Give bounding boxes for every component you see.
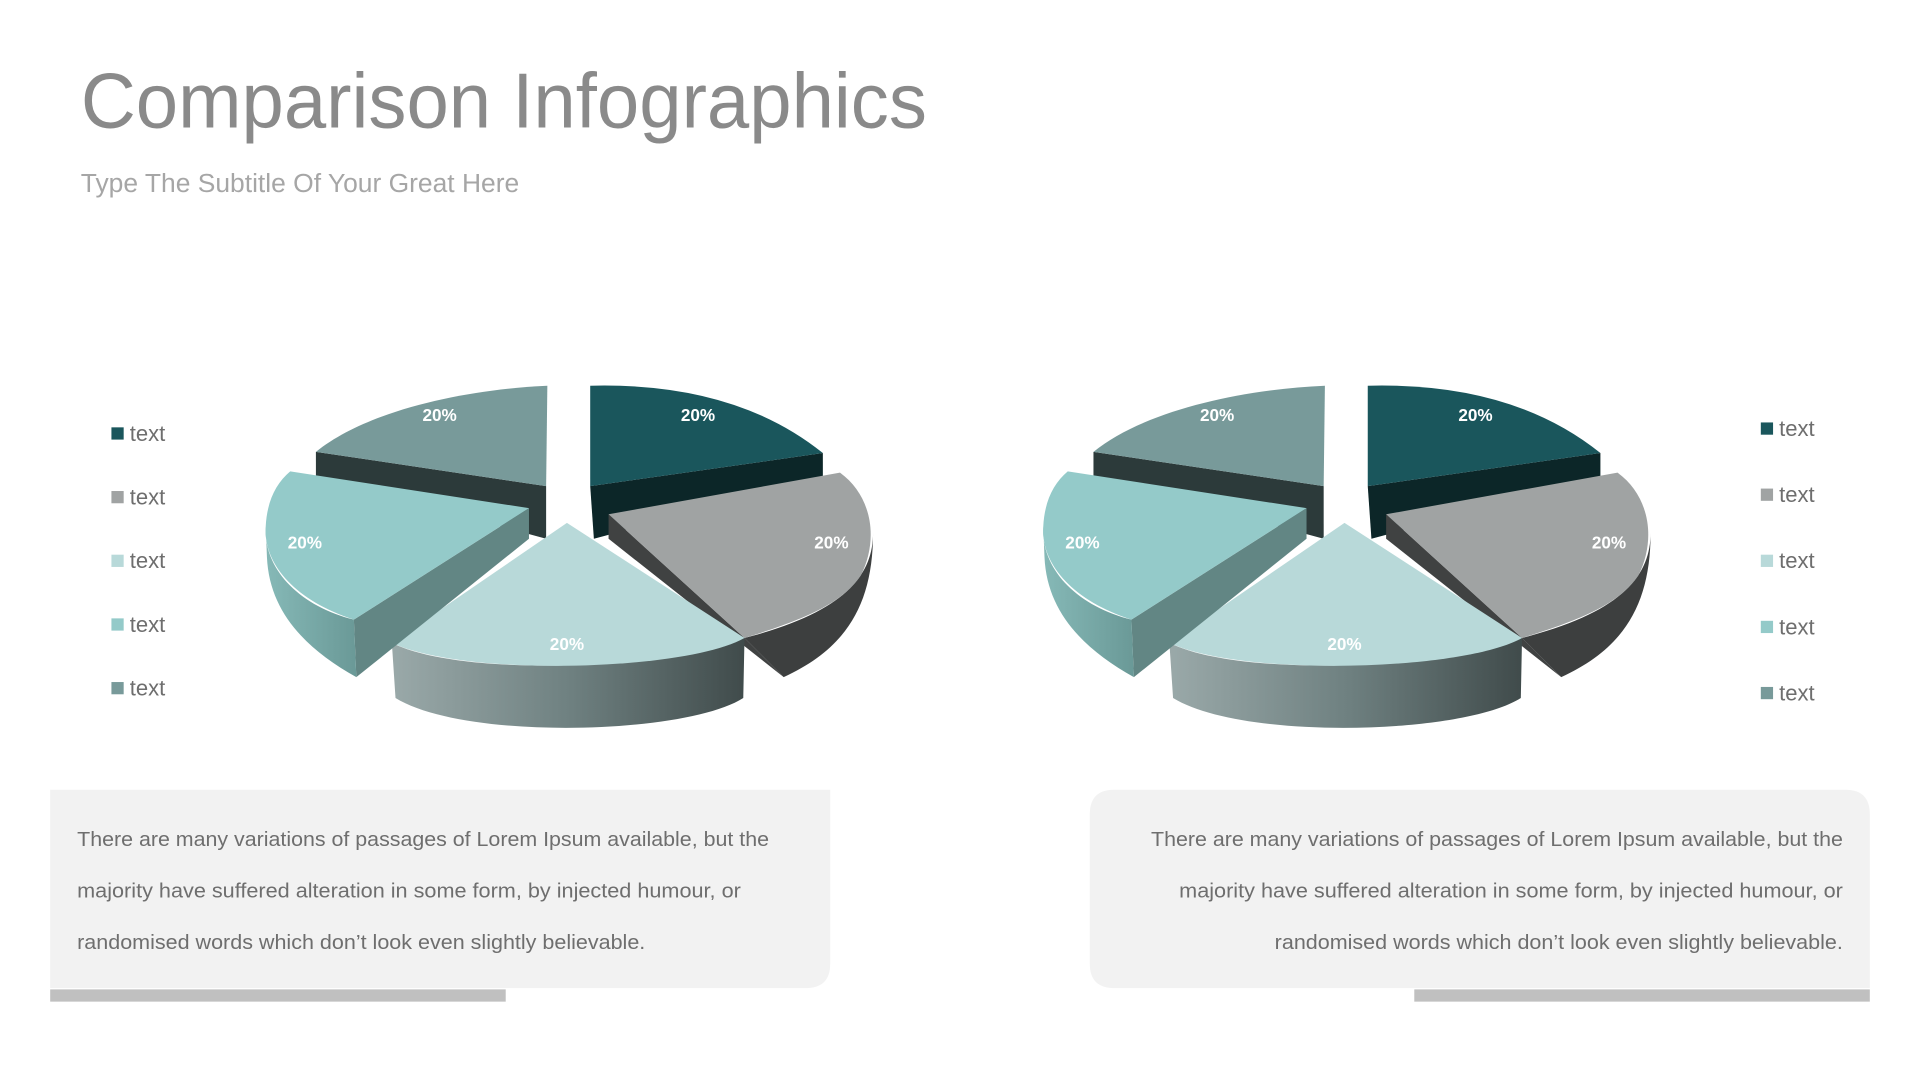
legend: right: text [1779, 680, 1815, 705]
legend: right: text [1779, 548, 1815, 573]
text box: left: randomised words which don’t look even slightly believable. [77, 932, 645, 954]
pie chart: left: 20% [814, 533, 849, 553]
legend: left: text [130, 548, 165, 573]
text box: right: randomised words which don’t look even slightly believable. [1275, 932, 1843, 954]
pie chart: left: 20% [550, 634, 584, 654]
legend: left: text [130, 676, 165, 701]
pie chart: left: 20% [681, 405, 715, 425]
text box: right: There are many variations of passages of Lorem Ipsum available, but the [1151, 829, 1843, 851]
text box: right: majority have suffered alteration in some form, by injected humour, or [1179, 881, 1843, 903]
text box: left: majority have suffered alteration in some form, by injected humour, or [77, 881, 741, 903]
pie chart: left: 20% [422, 405, 457, 425]
text box: right [1090, 790, 1870, 1002]
pie chart: left: 20% [288, 533, 322, 553]
text box: left: There are many variations of passages of Lorem Ipsum available, but the [77, 829, 769, 851]
legend: left: text [130, 484, 165, 509]
legend: left [111, 421, 165, 701]
title: Comparison Infographics [81, 56, 927, 144]
subtitle: Type The Subtitle Of Your Great Here [81, 170, 519, 198]
legend: right: text [1779, 482, 1815, 507]
pie chart: left [266, 386, 873, 728]
legend: left: text [130, 612, 165, 637]
legend: right: text [1779, 614, 1815, 639]
legend: left: text [130, 421, 165, 446]
text box: left [50, 790, 830, 1002]
pie chart: right [1043, 386, 1651, 728]
legend: right [1761, 416, 1815, 705]
legend: right: text [1779, 416, 1815, 441]
